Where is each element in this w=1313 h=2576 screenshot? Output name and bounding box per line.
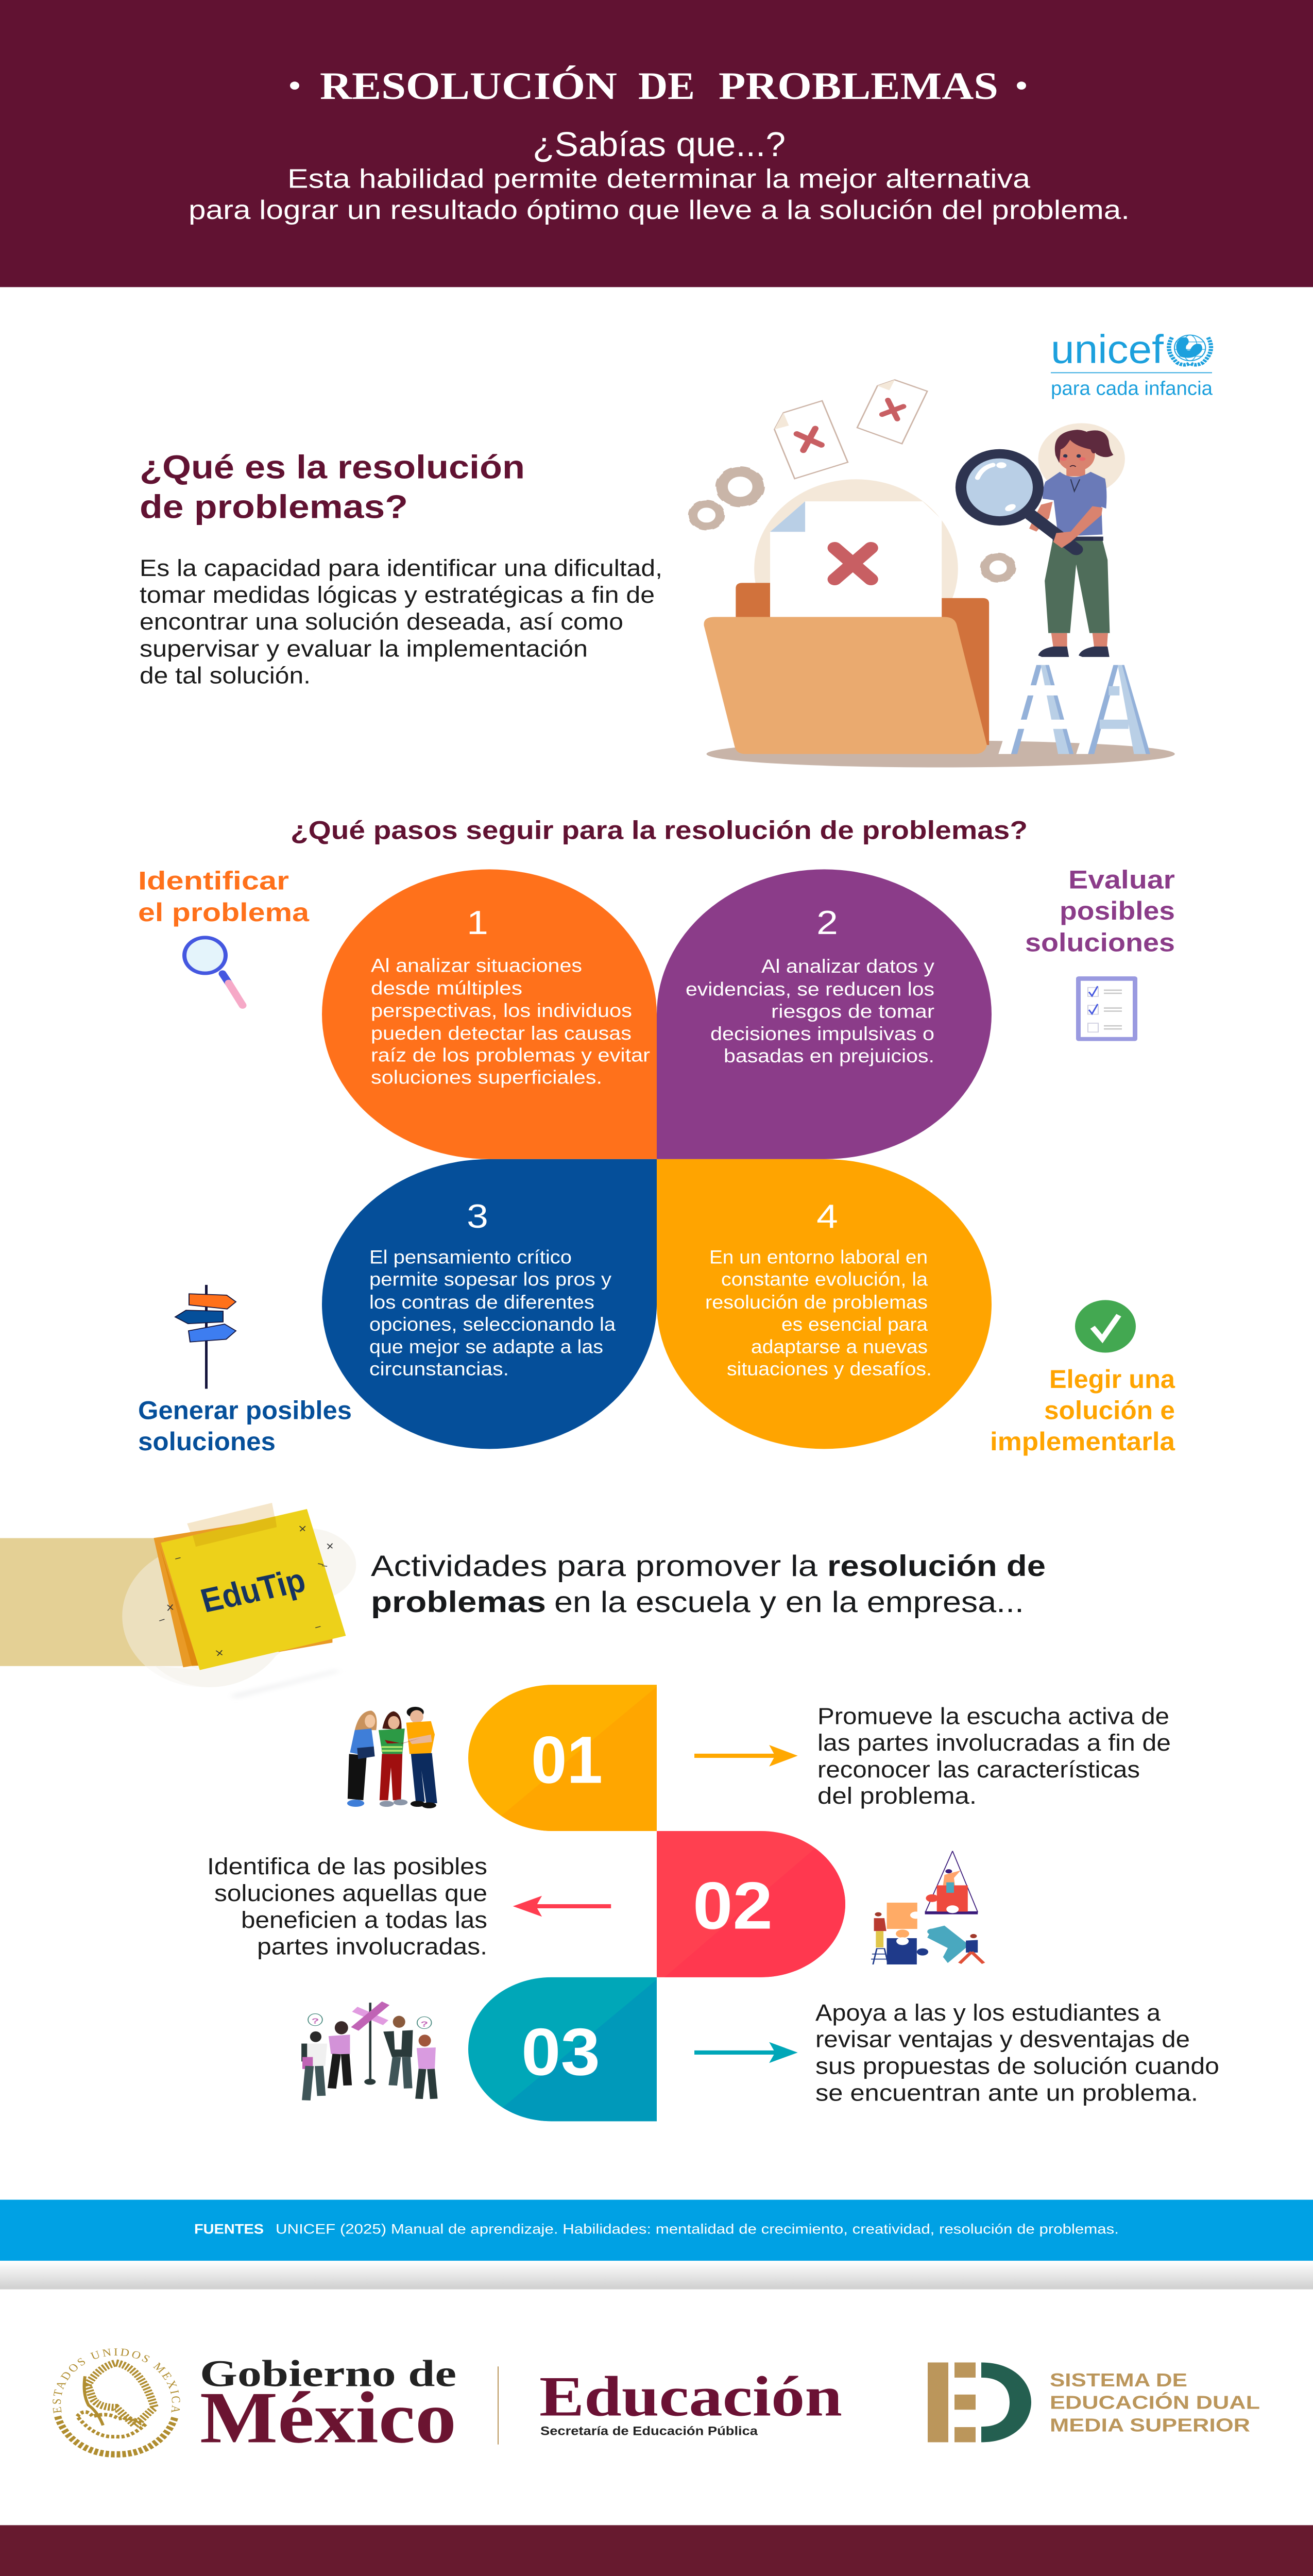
tab 03 [464, 1977, 657, 2121]
panel: sources band: FUENTES [194, 2222, 264, 2237]
number 2: 2 [816, 904, 838, 941]
subtitle: ¿Sabías que...? [533, 126, 786, 164]
logo: Educación: Secretaría de Educación Pública [540, 2424, 758, 2438]
petal 1 [322, 869, 657, 1159]
woman [956, 423, 1125, 657]
text step 4: adaptarse a nuevas [751, 1336, 928, 1358]
logo: Sistema de Educación Dual: EDUCACIÓN DUAL [1050, 2392, 1260, 2413]
illustration: group at crossroads: ? [312, 2017, 319, 2026]
text step 1: Al analizar situaciones [371, 955, 582, 976]
intro text: Esta habilidad permite determinar la mejor alternativa [287, 163, 1031, 193]
ladder [998, 665, 1150, 754]
text step 3: El pensamiento crítico [369, 1246, 572, 1268]
text step 4: En un entorno laboral en [709, 1246, 928, 1268]
icon: signpost [175, 1285, 236, 1389]
number 01: 01 [531, 1722, 603, 1797]
heading: activities: en la escuela y en la empresa... [554, 1586, 1024, 1619]
text step 2: riesgos de tomar [771, 1001, 934, 1022]
text step 1: pueden detectar las causas [371, 1023, 632, 1044]
panel: EduTip [0, 1503, 356, 1698]
label: evaluar posibles soluciones: posibles [1060, 897, 1175, 925]
text: activity 1 [817, 1704, 1171, 1809]
text step 3: los contras de diferentes [369, 1291, 594, 1313]
text step 4: resolución de problemas [705, 1291, 928, 1313]
tab 02 [657, 1831, 850, 1977]
text: activity 3: se encuentran ante un problema. [815, 2080, 1198, 2106]
text: activity 3 [815, 2000, 1219, 2106]
text step 2: basadas en prejuicios. [724, 1045, 934, 1066]
intro text [189, 163, 1130, 225]
text: activity 3: sus propuestas de solución cuando [815, 2054, 1219, 2079]
illustration: folder and woman with magnifier [690, 380, 1175, 768]
heading: activities: Actividades para promover la [371, 1550, 818, 1583]
section heading: steps: ¿Qué pasos seguir para la resolución de problemas? [291, 816, 1028, 845]
logo: coat of arms [53, 2348, 180, 2458]
intro text: para lograr un resultado óptimo que lleve a la solución del problema. [189, 195, 1130, 225]
text step 4: constante evolución, la [721, 1268, 928, 1290]
title: PROBLEMAS [719, 64, 998, 108]
text: activity 1: del problema. [817, 1783, 977, 1809]
text step 1: raíz de los problemas y evitar [371, 1044, 650, 1066]
label: identificar el problema [138, 867, 310, 927]
number 3: 3 [467, 1198, 488, 1235]
EduTip label: EduTip [197, 1561, 310, 1619]
text step 3: que mejor se adapte a las [369, 1336, 603, 1358]
tab 01 [464, 1685, 657, 1831]
folder front [704, 617, 987, 754]
text step 3 [369, 1246, 616, 1380]
number 02: 02 [693, 1868, 773, 1943]
label: evaluar posibles soluciones: Evaluar [1068, 866, 1175, 894]
text step 2 [686, 956, 935, 1066]
label: evaluar posibles soluciones: soluciones [1025, 928, 1175, 957]
section heading: what is problem solving: ¿Qué es la resolución [140, 448, 525, 485]
heading: activities: resolución de [827, 1550, 1046, 1583]
panel: sources band: UNICEF (2025) Manual de aprendizaje. Habilidades: mentalidad de crecimiento, creatividad, resolución de problemas. [276, 2222, 1119, 2237]
petal 2 [657, 869, 992, 1159]
text: activity 2: beneficien a todas las [241, 1907, 487, 1933]
text step 1 [371, 955, 650, 1088]
panel: sources band [0, 2200, 1313, 2261]
title: RESOLUCIÓN [320, 64, 617, 108]
text: activity 1: las partes involucradas a fin de [817, 1730, 1171, 1756]
title: DE [638, 64, 695, 108]
text: activity 3: Apoya a las y los estudiantes a [815, 2000, 1161, 2026]
logo: Gobierno de México: México [200, 2378, 456, 2459]
number 4: 4 [816, 1198, 838, 1235]
text step 3: opciones, seleccionando la [369, 1314, 616, 1335]
number 03: 03 [521, 2014, 600, 2089]
text block: definition: tomar medidas lógicas y estratégicas a fin de [140, 582, 655, 608]
panel: header [0, 0, 1313, 287]
text step 1: desde múltiples [371, 977, 522, 999]
label: identificar el problema: el problema [138, 898, 310, 927]
label: generar posibles soluciones: soluciones [138, 1428, 276, 1456]
label: generar posibles soluciones: Generar posibles [138, 1396, 352, 1425]
logo: Educación: Educación [539, 2364, 842, 2428]
logo: Gobierno de México: Gobierno de [200, 2353, 456, 2395]
text step 2: Al analizar datos y [761, 956, 935, 977]
label: elegir una solución [990, 1365, 1175, 1456]
label: elegir una solución: Elegir una [1049, 1365, 1175, 1394]
heading: activities: problemas [371, 1586, 546, 1619]
footer bar [0, 2525, 1313, 2576]
text step 4 [705, 1246, 932, 1380]
folder back [736, 583, 989, 745]
label: evaluar posibles soluciones [1025, 866, 1175, 957]
title [290, 64, 1026, 108]
label: generar posibles soluciones [138, 1396, 352, 1456]
text: activity 2: soluciones aquellas que [214, 1880, 487, 1906]
small document left [774, 401, 848, 479]
text block: definition [140, 555, 662, 689]
logo: unicef [1051, 327, 1213, 399]
logo: coat of arms: ESTADOS UNIDOS MEXICANOS [53, 2348, 180, 2413]
logo: Sistema de Educación Dual: SISTEMA DE [1050, 2370, 1187, 2391]
small document right [857, 380, 927, 444]
text step 3: circunstancias. [369, 1358, 509, 1380]
text: activity 1: Promueve la escucha activa de [817, 1704, 1169, 1729]
text block: definition: de tal solución. [140, 663, 311, 689]
heading: activities [371, 1550, 1046, 1619]
logo: unicef: unicef [1051, 327, 1164, 371]
illustration: group at crossroads: ? [420, 2020, 428, 2028]
label: identificar el problema: Identificar [138, 867, 289, 895]
text block: definition: encontrar una solución deseada, así como [140, 609, 623, 635]
section heading: what is problem solving: de problemas? [140, 488, 408, 525]
text step 2: decisiones impulsivas o [710, 1023, 934, 1044]
icon: magnifying glass [184, 938, 243, 1005]
illustration: students reading [347, 1707, 437, 1808]
icon: checklist [1076, 976, 1137, 1041]
section heading: what is problem solving [140, 448, 525, 525]
text: activity 3: revisar ventajas y desventajas de [815, 2027, 1190, 2053]
text step 4: es esencial para [781, 1314, 928, 1335]
number 1: 1 [467, 904, 488, 941]
label: elegir una solución: solución e [1044, 1396, 1175, 1425]
magnifier [956, 449, 1076, 549]
arrow 02 [513, 1896, 611, 1917]
text: activity 2: partes involucradas. [257, 1934, 487, 1960]
gears [690, 468, 1014, 581]
text: activity 1: reconocer las características [817, 1757, 1140, 1783]
text block: definition: Es la capacidad para identificar una dificultad, [140, 555, 662, 581]
logo: Sistema de Educación Dual [928, 2362, 1260, 2442]
text block: definition: supervisar y evaluar la implementación [140, 636, 588, 662]
logo: Sistema de Educación Dual: MEDIA SUPERIOR [1050, 2415, 1250, 2436]
text: activity 2: Identifica de las posibles [207, 1854, 487, 1879]
logo: unicef: para cada infancia [1051, 377, 1213, 399]
paper with red X [770, 501, 942, 617]
text step 1: soluciones superficiales. [371, 1066, 602, 1088]
illustration: group at crossroads [301, 2003, 436, 2100]
text step 4: situaciones y desafíos. [727, 1358, 932, 1380]
text step 1: perspectivas, los individuos [371, 1000, 632, 1021]
text: activity 2 [207, 1854, 487, 1960]
petal 3 [322, 1159, 657, 1449]
text step 3: permite sopesar los pros y [369, 1268, 612, 1290]
petal 4 [657, 1159, 992, 1449]
arrow 03 [694, 2042, 798, 2063]
label: elegir una solución: implementarla [990, 1428, 1175, 1456]
illustration: puzzle team [871, 1851, 983, 1964]
icon: check [1075, 1300, 1136, 1352]
arrow 01 [694, 1745, 798, 1767]
text step 2: evidencias, se reducen los [686, 978, 934, 1000]
